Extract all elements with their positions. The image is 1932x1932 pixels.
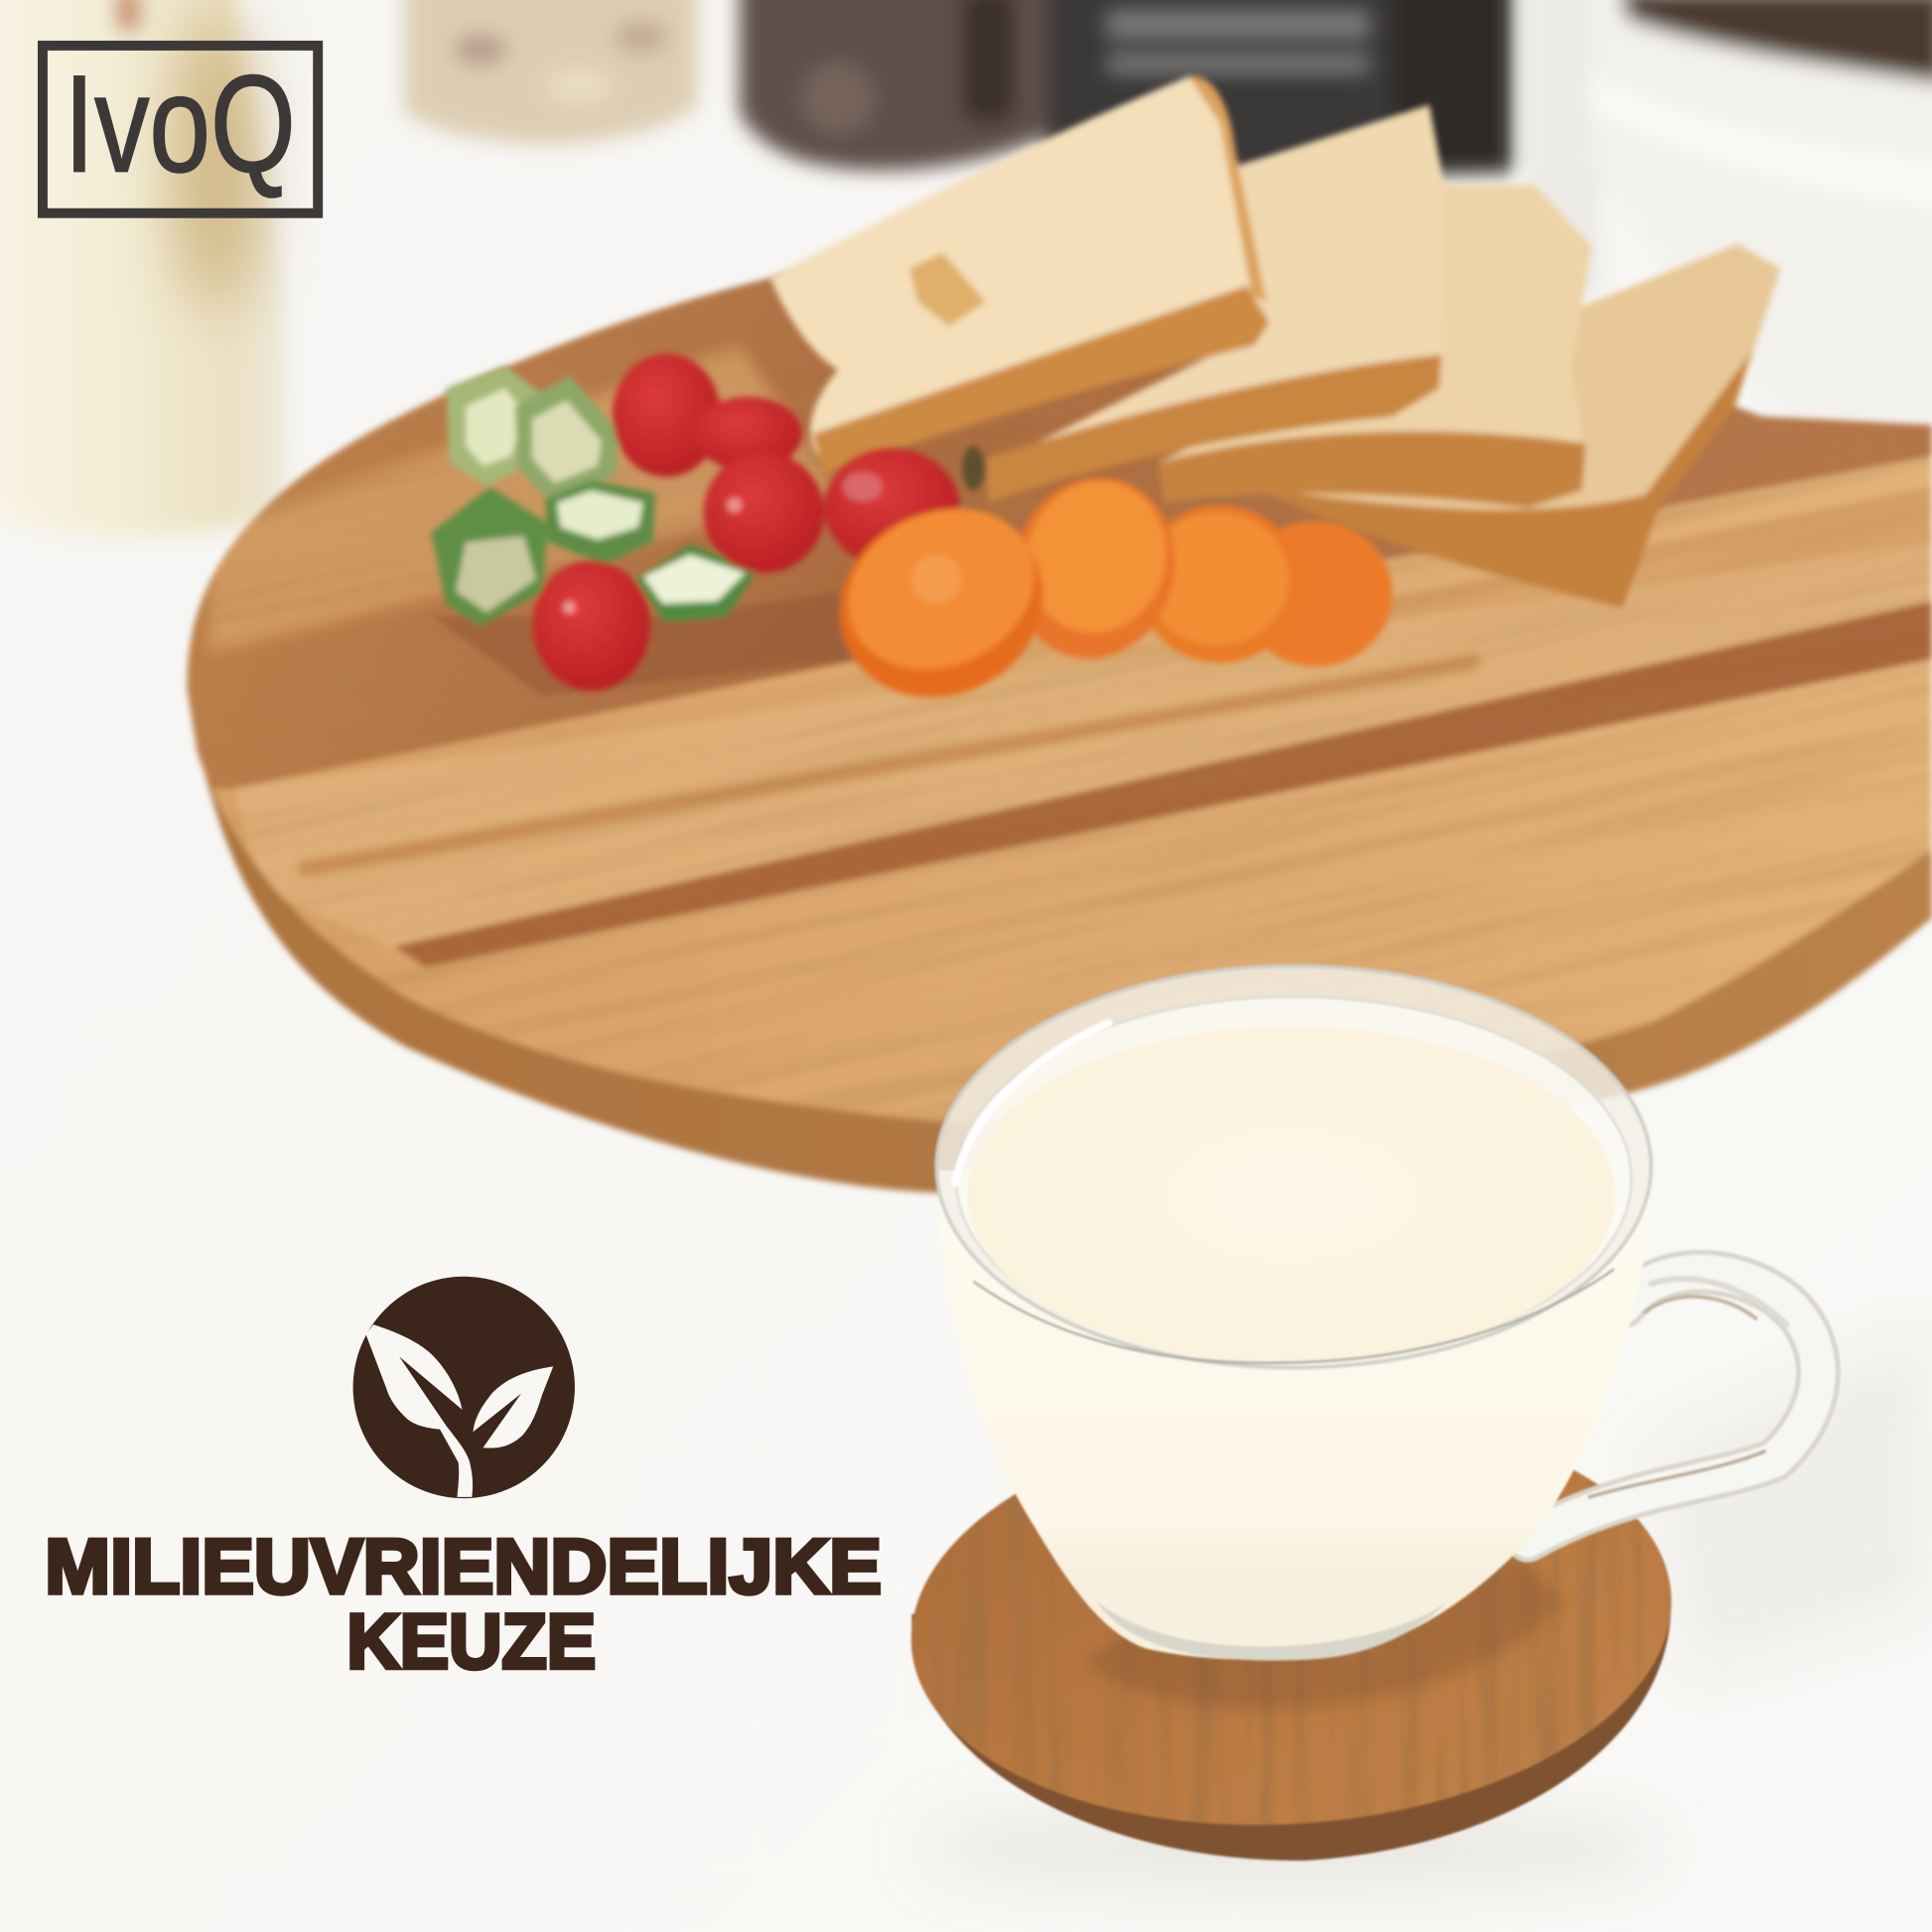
black label jar: [1047, 0, 1513, 185]
white bowl: [1528, 0, 1932, 434]
raisin mark: [909, 252, 986, 327]
slice four: [1257, 244, 1780, 610]
logo: IvoQ: [43, 46, 318, 213]
cup shadow on coaster: [1084, 1553, 1565, 1710]
carrots: [809, 460, 1392, 730]
heading: [45, 1523, 882, 1685]
heading line one: MILIEUVRIENDELIJKE: [45, 1523, 882, 1610]
large leaf and stem: [366, 1324, 473, 1497]
milk bottle: [0, 0, 286, 537]
heading line two: KEUZE: [346, 1597, 596, 1685]
glass rim: [936, 966, 1651, 1368]
cup body: [939, 1171, 1651, 1660]
slice three: [1159, 185, 1591, 462]
granola jar: [404, 0, 697, 144]
icon: leaf sprout in circle: [353, 1277, 575, 1498]
tomatoes: [532, 353, 985, 691]
cup base: [1097, 1601, 1448, 1661]
photo: table shadows: [924, 1330, 1932, 1885]
coaster top: [897, 1391, 1685, 1850]
small leaf: [474, 1366, 553, 1449]
slice one: [770, 76, 1267, 459]
photo: background jars and bottle: [0, 0, 1932, 537]
photo: glass cup of milk: [936, 966, 1818, 1661]
middle light plank: [234, 542, 1932, 949]
okra group: [431, 366, 758, 625]
handle: [1528, 1272, 1818, 1540]
icon disc: [353, 1277, 575, 1498]
thin stripe: [296, 653, 1478, 878]
milk surface: [967, 1027, 1615, 1364]
upper plank light band: [209, 345, 838, 653]
board surface: [189, 343, 1932, 1124]
dark stripe: [394, 602, 1932, 967]
photo: wooden coaster: [909, 1469, 1673, 1863]
rim front shadow: [973, 1269, 1614, 1363]
dark jar: [740, 0, 1047, 171]
bottle neck tag: [114, 0, 142, 35]
photo: bread slices: [770, 76, 1780, 610]
photo: vegetables: [431, 353, 1392, 730]
rim shine: [955, 1023, 1109, 1182]
shadow under vegetables: [431, 592, 850, 696]
logo frame: [43, 46, 318, 213]
logo text: IvoQ: [65, 48, 296, 202]
slice two: [986, 104, 1445, 469]
coaster side: [911, 1614, 1671, 1861]
right plank light band: [1391, 488, 1932, 619]
upper dark plank: [185, 276, 1932, 790]
wood grain: [251, 480, 1927, 1116]
board side: [188, 185, 1932, 1192]
bowl contents: [1620, 0, 1932, 83]
coaster grain: [936, 1483, 1642, 1825]
photo: wooden board: [183, 270, 1932, 1198]
crust edge: [1189, 76, 1267, 302]
inner rim: [956, 997, 1631, 1361]
